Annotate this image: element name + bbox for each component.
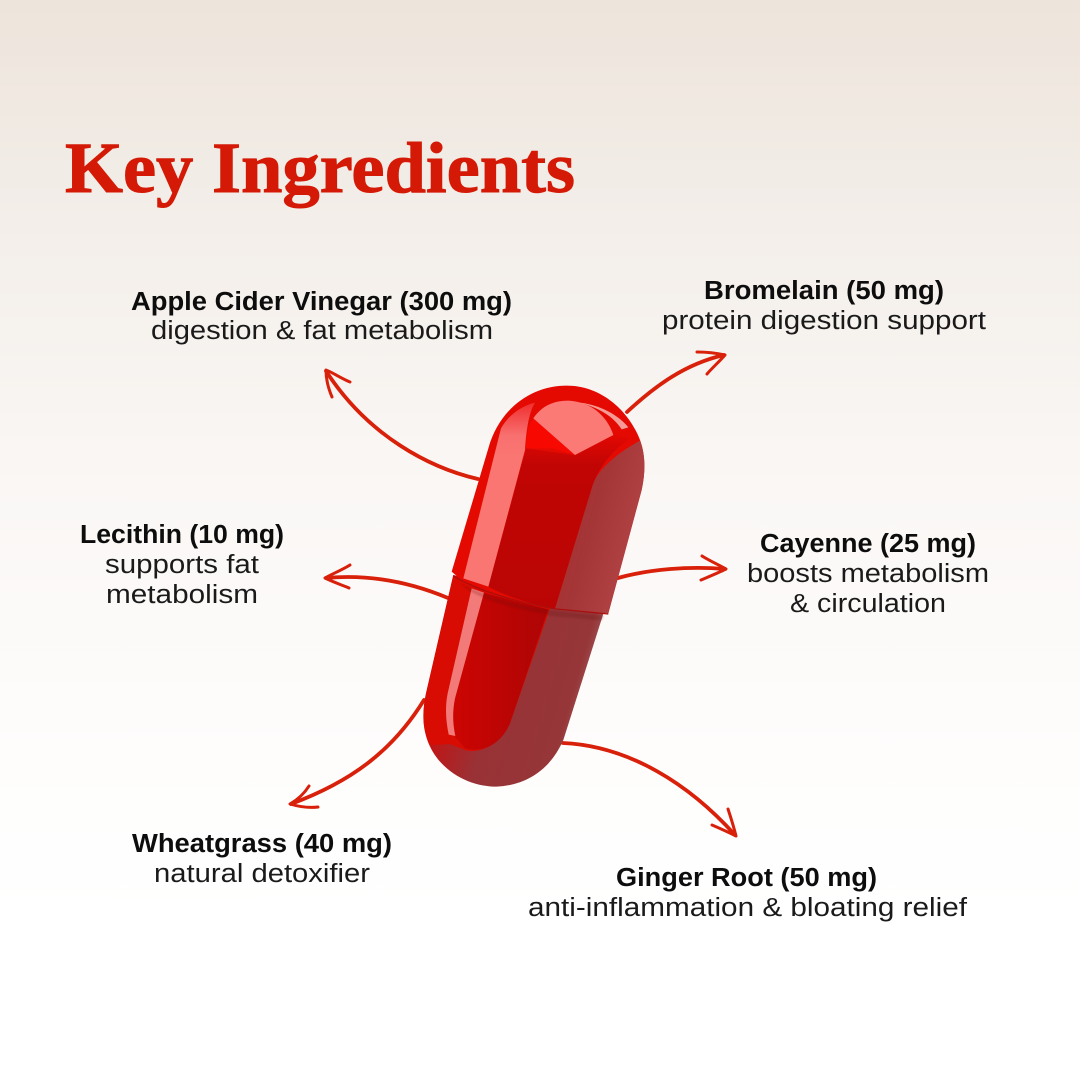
arrow: apple cider vinegar	[326, 370, 478, 479]
cap top rim highlight	[580, 403, 628, 429]
label: apple cider vinegar	[131, 288, 512, 345]
label: lecithin: metabolism	[106, 581, 258, 609]
lower dark red reflection	[453, 593, 548, 750]
label: apple cider vinegar: Apple Cider Vinegar (300 mg)	[131, 288, 512, 316]
capsule lower body	[423, 575, 604, 787]
arrow: bromelain	[627, 352, 725, 412]
capsule upper cap	[452, 386, 644, 613]
lower highlight strip	[446, 588, 484, 736]
cap dark red reflection	[488, 435, 630, 608]
label: ginger root	[528, 864, 968, 922]
cap matte side	[555, 441, 644, 613]
cap bright red patch	[526, 418, 575, 455]
label: bromelain: protein digestion support	[662, 307, 986, 335]
title: Key Ingredients	[65, 128, 575, 208]
label: wheatgrass: natural detoxifier	[154, 860, 371, 888]
seam shadow	[460, 583, 604, 621]
label: lecithin	[80, 521, 284, 609]
label: cayenne	[747, 530, 989, 618]
label: bromelain	[662, 277, 986, 335]
label: lecithin: supports fat	[105, 551, 259, 579]
label: cayenne: Cayenne (25 mg)	[760, 530, 976, 558]
capsule seam	[453, 576, 608, 614]
arrow: lecithin	[325, 565, 448, 598]
label: bromelain: Bromelain (50 mg)	[704, 277, 944, 305]
label: wheatgrass: Wheatgrass (40 mg)	[132, 830, 392, 858]
arrow: ginger root	[563, 743, 736, 836]
label: cayenne: boosts metabolism	[747, 560, 989, 588]
cap left highlight strip	[463, 403, 535, 587]
label: ginger root: Ginger Root (50 mg)	[616, 864, 877, 892]
capsule	[423, 386, 644, 787]
label: wheatgrass	[132, 830, 392, 888]
label: cayenne: & circulation	[790, 590, 946, 618]
arrow: cayenne	[618, 556, 726, 580]
lower glossy red side	[423, 575, 550, 751]
label: lecithin: Lecithin (10 mg)	[80, 521, 284, 549]
arrow: wheatgrass	[290, 700, 424, 807]
label: ginger root: anti-inflammation & bloating relief	[528, 894, 968, 922]
cap top highlight	[533, 401, 613, 455]
label: apple cider vinegar: digestion & fat metabolism	[151, 317, 493, 345]
